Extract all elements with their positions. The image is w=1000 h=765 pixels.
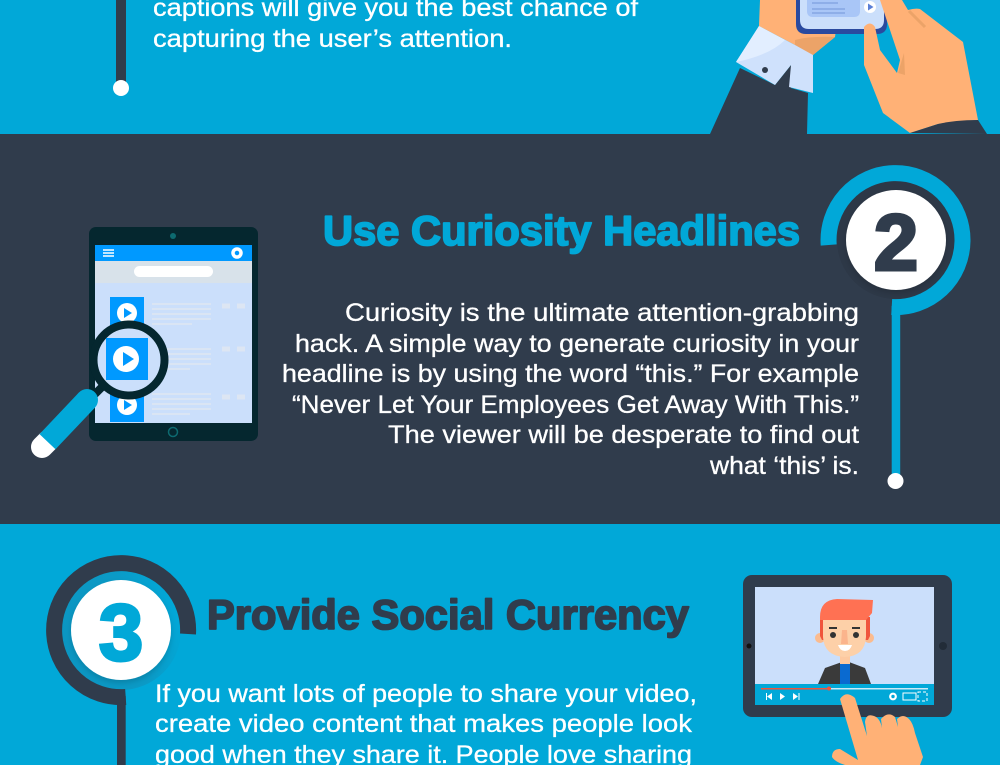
text block: tip 2 body: Curiosity is the ultimate attention-grabbing	[345, 299, 859, 327]
panel: tip 3	[0, 524, 1000, 765]
timeline stem: tip 1	[113, 0, 129, 96]
panel: tip 1	[0, 0, 1000, 134]
text block: tip 3 body: If you want lots of people to share your video,	[155, 680, 697, 708]
text block: tip 2 body: hack. A simple way to generate curiosity in your	[295, 330, 859, 358]
presenter character	[815, 599, 874, 684]
text block: tip 2 body: what ‘this’ is.	[709, 452, 859, 480]
number badge 2: 2	[874, 198, 918, 287]
icon: tablet with magnifier	[42, 227, 258, 447]
text block: tip 1 body	[153, 0, 638, 53]
text block: tip 2 body	[282, 299, 859, 480]
text block: tip 3 body: create video content that makes people look	[155, 710, 693, 738]
number badge 3	[54, 563, 188, 765]
text block: tip 2 body: The viewer will be desperate to find out	[388, 421, 859, 449]
text block: tip 2 body: “Never Let Your Employees Get Away With This.”	[292, 391, 859, 419]
panel: tip 2	[0, 134, 1000, 524]
number badge 3: 3	[99, 588, 143, 677]
heading: Provide Social Currency: Provide Social Currency	[207, 591, 690, 638]
text block: tip 2 body: headline is by using the word “this.” For example	[282, 360, 859, 388]
number badge 2	[829, 173, 963, 489]
icon: hands holding phone	[710, 0, 987, 134]
text block: tip 1 body: capturing the user’s attention.	[153, 25, 512, 53]
icon: tablet video player with hand	[743, 575, 952, 765]
heading: Use Curiosity Headlines: Use Curiosity Headlines	[323, 207, 800, 254]
text block: tip 3 body	[155, 680, 697, 765]
hand tapping	[832, 694, 923, 765]
